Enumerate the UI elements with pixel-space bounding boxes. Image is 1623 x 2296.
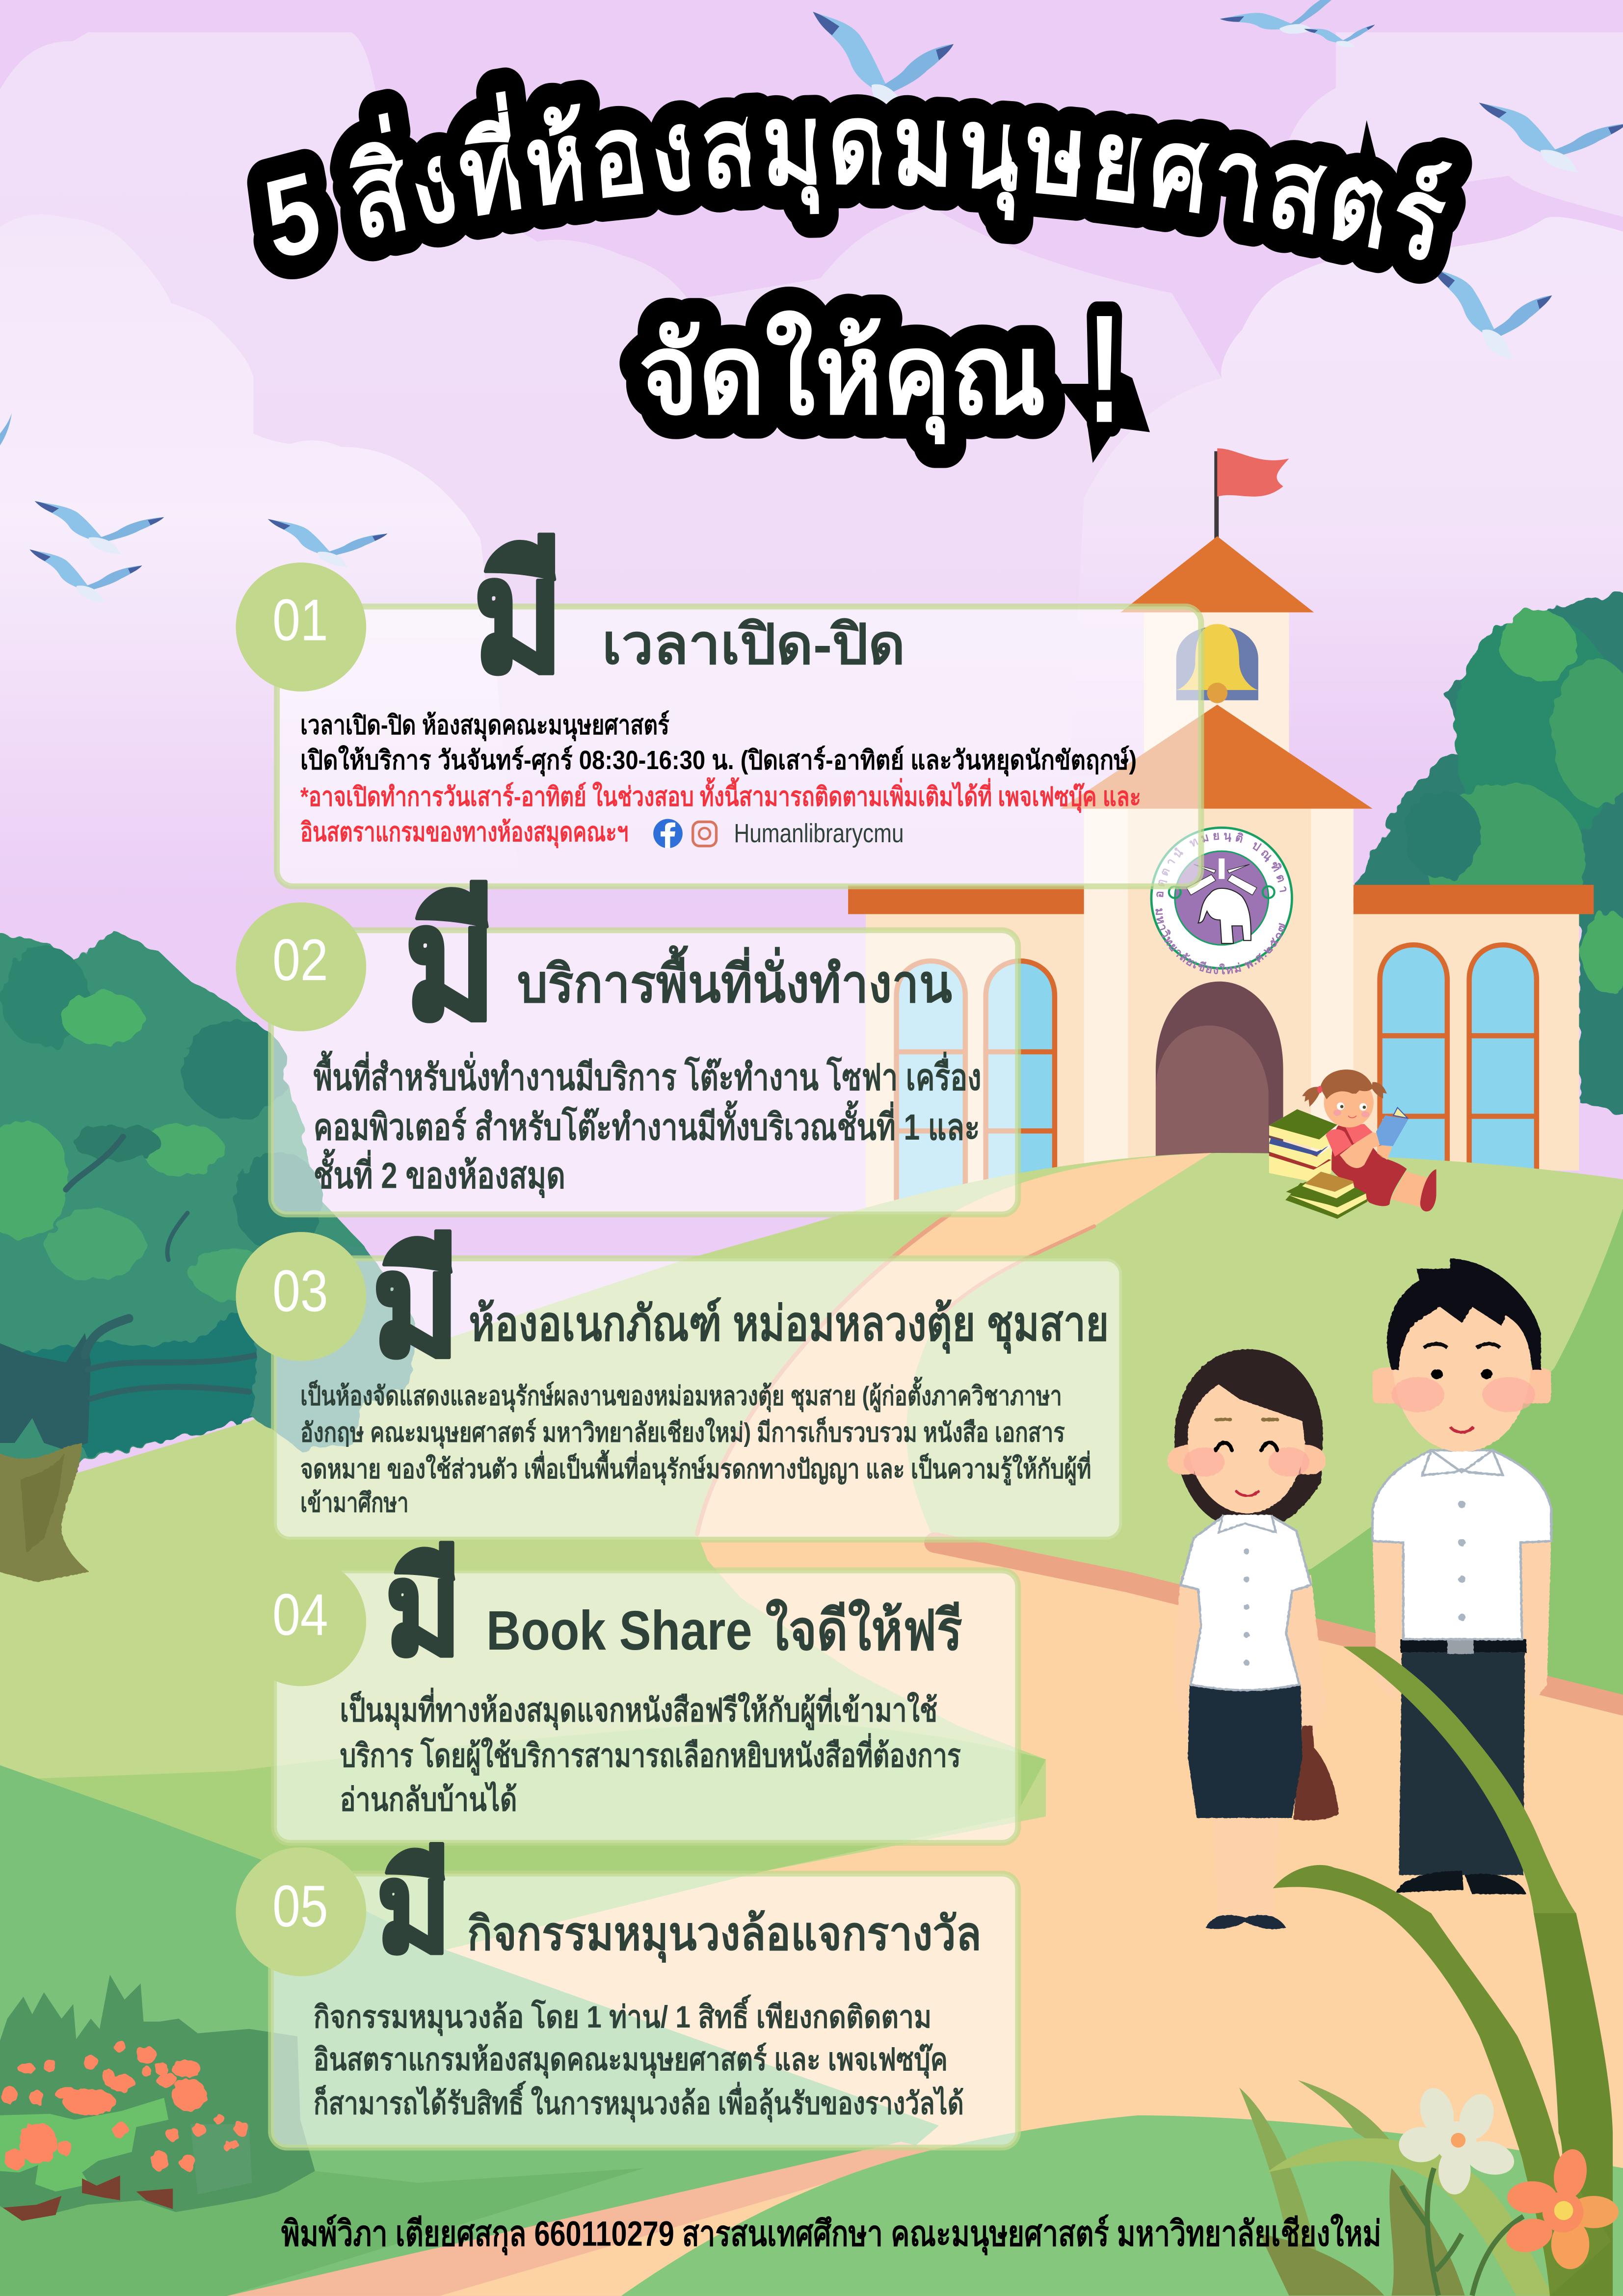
body text: บริการ โดยผู้ใช้บริการสามารถเลือกหยิบหนังสือที่ต้องการ	[340, 1733, 961, 1776]
open book	[1376, 1116, 1409, 1146]
body text: ก็สามารถได้รับสิทธิ์ ในการหมุนวงล้อ เพื่อลุ้นรับของรางวัลได้	[314, 2081, 964, 2122]
body text: อินสตราแกรมห้องสมุดคณะมนุษยศาสตร์ และ เพจเฟซบุ๊ค	[314, 2042, 948, 2078]
windows	[897, 945, 1537, 1208]
right cheek	[1482, 1377, 1535, 1412]
ears	[1373, 1367, 1551, 1403]
panel body	[274, 1258, 1122, 1540]
handle text: Humanlibrarycmu	[734, 819, 904, 848]
right cheek	[1269, 1447, 1309, 1477]
legs	[1213, 1818, 1279, 1918]
stacked books	[1269, 1109, 1337, 1182]
body text	[300, 710, 1141, 848]
orange flowers	[0, 2041, 249, 2171]
right eaves	[1354, 885, 1594, 914]
bird right of title	[1479, 103, 1623, 172]
title spike	[1357, 120, 1380, 173]
icon: instagram	[693, 822, 716, 846]
library building	[848, 448, 1594, 1207]
blouse	[1181, 1516, 1311, 1690]
shoe	[1420, 1169, 1437, 1211]
eyes, brows and mouth	[1424, 1344, 1500, 1432]
lower left grass	[0, 2109, 644, 2296]
body text: พื้นที่สำหรับนั่งทำงานมีบริการ โต๊ะทำงาน โซฟา เครื่อง	[314, 1050, 982, 1098]
panel 04: book share	[236, 1537, 1018, 1843]
bird large top centre	[813, 12, 954, 119]
bird left three	[268, 519, 387, 567]
tree foliage over hill	[252, 1245, 418, 1450]
dress	[1331, 1125, 1407, 1206]
head	[1324, 1078, 1374, 1127]
hair	[1320, 1069, 1373, 1099]
right tree	[1357, 586, 1623, 1128]
big word มี: มี	[404, 875, 497, 1052]
eyes	[1337, 1102, 1367, 1111]
ears	[1168, 1444, 1326, 1474]
foreground plants	[1239, 1647, 1619, 2296]
arching leaf	[1273, 1865, 1611, 2296]
sleeve	[1326, 1129, 1352, 1157]
heading: เวลาเปิด-ปิด	[602, 614, 905, 676]
buttons	[1458, 1501, 1465, 1621]
right wing wall	[1354, 914, 1579, 1171]
number 03: 03	[272, 1258, 328, 1324]
mid green hill	[0, 1765, 939, 2296]
left tree trunk	[0, 1443, 89, 1582]
bird small top right	[1304, 17, 1378, 55]
number 02: 02	[272, 928, 328, 993]
panel 02: work space	[236, 875, 1018, 1214]
number 04: 04	[272, 1582, 328, 1648]
upper tower	[1144, 613, 1289, 818]
lower books	[1285, 1172, 1367, 1219]
panel body	[277, 607, 1201, 886]
collar	[1422, 1450, 1503, 1475]
book pages	[1393, 1108, 1408, 1118]
title exclamation mark: !	[1087, 283, 1122, 455]
panel body	[271, 930, 1018, 1214]
skirt	[1188, 1684, 1302, 1818]
heading: ห้องอเนกภัณฑ์ หม่อมหลวงตุ้ย ชุมสาย	[469, 1297, 1109, 1354]
university seal: มหาวิทยาลัยเชียงใหม่ พ.ศ.๒๕๐๗	[1155, 908, 1285, 975]
clouds	[0, 32, 1623, 908]
face	[1188, 1385, 1305, 1513]
arms	[1373, 1538, 1551, 1699]
path	[227, 1153, 1623, 2296]
big word มี: มี	[473, 528, 564, 705]
hair tie	[1317, 1086, 1322, 1093]
number badge 04	[236, 1557, 366, 1686]
tower shaded centre	[1128, 809, 1311, 1175]
hair	[1174, 1349, 1323, 1523]
bird wing at left edge	[0, 413, 12, 445]
body text: อินสตราแกรมของทางห้องสมุดคณะฯ	[300, 817, 628, 848]
panel 01: opening hours	[236, 528, 1201, 886]
mid green lobe	[0, 1721, 1046, 1963]
body text	[314, 1050, 982, 1199]
left wing wall	[866, 914, 1084, 1207]
body text	[314, 1994, 964, 2122]
orange flower	[1502, 2147, 1619, 2269]
right pigtail	[1372, 1082, 1387, 1098]
bird left two	[29, 549, 142, 603]
darker right hill	[1128, 1208, 1623, 1721]
heading: กิจกรรมหมุนวงล้อแจกรางวัล	[467, 1908, 982, 1963]
body text: กิจกรรมหมุนวงล้อ โดย 1 ท่าน/ 1 สิทธิ์ เพียงกดติดตาม	[314, 1994, 931, 2036]
university seal: อตฺตานํ ทมยนฺติ ปณฺฑิตา	[1156, 832, 1287, 897]
body text: เป็นห้องจัดแสดงและอนุรักษ์ผลงานของหม่อมหลวงตุ้ย ชุมสาย (ผู้ก่อตั้งภาควิชาภาษา	[300, 1376, 1062, 1412]
heading: Book Share ใจดีให้ฟรี	[486, 1599, 962, 1662]
title	[247, 68, 1472, 468]
left eaves	[848, 885, 1084, 914]
body text: จดหมาย ของใช้ส่วนตัว เพื่อเป็นพื้นที่อนุรักษ์มรดกทางปัญญา และ เป็นความรู้ให้กับผู้ที่	[300, 1450, 1091, 1486]
panel body	[274, 1571, 1018, 1843]
bright green foliage	[0, 2098, 168, 2191]
woman student	[1168, 1349, 1339, 1929]
title line one: 5 สิ่งที่ห้องสมุดมนุษยศาสตร์	[247, 68, 1472, 284]
bird left one	[35, 501, 164, 555]
title star	[1058, 366, 1150, 463]
small grass leaves	[1239, 2087, 1326, 2296]
door	[1156, 982, 1283, 1165]
body text: เปิดให้บริการ วันจันทร์-ศุกร์ 08:30-16:30 น. (ปิดเสาร์-อาทิตย์ และวันหยุดนักขัตฤกษ์)	[300, 745, 1137, 776]
big leaf one	[1343, 1647, 1576, 1913]
buckle	[1447, 1638, 1474, 1654]
muted foliage	[190, 2124, 252, 2194]
flag	[1214, 448, 1289, 539]
bush with flowers	[0, 1975, 315, 2221]
bush shadow foliage	[0, 1975, 315, 2221]
lower right hill	[621, 2115, 1623, 2296]
man student	[1373, 1258, 1551, 1894]
body text	[300, 1376, 1091, 1518]
face	[1393, 1296, 1531, 1452]
shirt	[1373, 1450, 1551, 1639]
big word มี: มี	[376, 1839, 451, 1978]
flower stem	[1402, 2168, 1523, 2296]
number 01: 01	[272, 587, 328, 653]
body text: ชั้นที่ 2 ของห้องสมุด	[314, 1148, 565, 1199]
upper roof	[1120, 536, 1314, 613]
white flower	[1399, 2084, 1518, 2194]
big word มี: มี	[385, 1537, 461, 1682]
bird top right	[1220, 0, 1354, 59]
arms	[1173, 1575, 1326, 1743]
bush roots	[3, 2175, 173, 2221]
lower path pink edge	[227, 2142, 937, 2296]
collar	[1219, 1515, 1276, 1532]
bell opening and bell	[1176, 624, 1258, 703]
bird lower right of title	[1433, 268, 1552, 359]
title line two: จัดให้คุณ	[639, 310, 1046, 445]
body text: เข้ามาศึกษา	[300, 1488, 409, 1518]
eyes and mouth	[1216, 1419, 1277, 1495]
body text: เวลาเปิด-ปิด ห้องสมุดคณะมนุษยศาสตร์	[300, 710, 669, 741]
number badge 02	[236, 903, 366, 1031]
panel 05: prize wheel	[236, 1839, 1018, 2148]
number 05: 05	[272, 1874, 328, 1939]
cheeks and mouth	[1333, 1110, 1369, 1118]
number badge 01	[236, 562, 366, 692]
belt	[1400, 1639, 1526, 1653]
lower tower body	[1084, 809, 1354, 1175]
panel body	[271, 1873, 1018, 2148]
pants	[1399, 1653, 1525, 1875]
shoes	[1396, 1870, 1526, 1894]
shin	[1390, 1172, 1428, 1207]
body text: คอมพิวเตอร์ สำหรับโต๊ะทำงานมีทั้งบริเวณชั้นที่ 1 และ	[314, 1100, 980, 1148]
lower roof	[1061, 705, 1373, 809]
light green hill	[0, 1153, 1623, 2296]
body text: อังกฤษ คณะมนุษยศาสตร์ มหาวิทยาลัยเชียงใหม่) มีการเก็บรวบรวม หนังสือ เอกสาร	[300, 1417, 1065, 1449]
left tree canopy	[0, 926, 363, 1509]
tree branches	[0, 1137, 256, 1450]
shoes	[1205, 1915, 1286, 1929]
path edges	[697, 1214, 1623, 1705]
heading: บริการพื้นที่นั่งทำงาน	[517, 945, 952, 1014]
footer credit: พิมพ์วิภา เตียยศสกุล 660110279 สารสนเทศศึกษา คณะมนุษยศาสตร์ มหาวิทยาลัยเชียงใหม่	[281, 2214, 1382, 2256]
hair	[1387, 1258, 1541, 1370]
left pigtail	[1302, 1087, 1320, 1107]
university seal	[1150, 827, 1293, 975]
panel 03: exhibition room	[236, 1225, 1122, 1540]
icon: facebook	[653, 819, 683, 848]
body text: อ่านกลับบ้านได้	[340, 1781, 517, 1817]
main stem leaf	[1534, 1913, 1613, 2296]
body text: เป็นมุมที่ทางห้องสมุดแจกหนังสือฟรีให้กับผู้ที่เข้ามาใช้	[340, 1687, 937, 1731]
arm	[1340, 1132, 1392, 1168]
number badge 05	[236, 1847, 366, 1976]
big word มี: มี	[372, 1225, 460, 1386]
body text: *อาจเปิดทำการวันเสาร์-อาทิตย์ ในช่วงสอบ ทั้งนี้สามารถติดตามเพิ่มเติมได้ที่ เพจเฟซบุ๊ค และ	[300, 777, 1141, 813]
girl reading with books	[1269, 1069, 1437, 1219]
cheeks	[1184, 1447, 1224, 1477]
cheeks	[1391, 1377, 1444, 1412]
birds	[0, 0, 1623, 603]
number badge 03	[236, 1232, 366, 1361]
buttons	[1244, 1548, 1250, 1666]
bag	[1293, 1726, 1339, 1820]
body text	[340, 1687, 961, 1817]
collar top	[1345, 1124, 1372, 1144]
